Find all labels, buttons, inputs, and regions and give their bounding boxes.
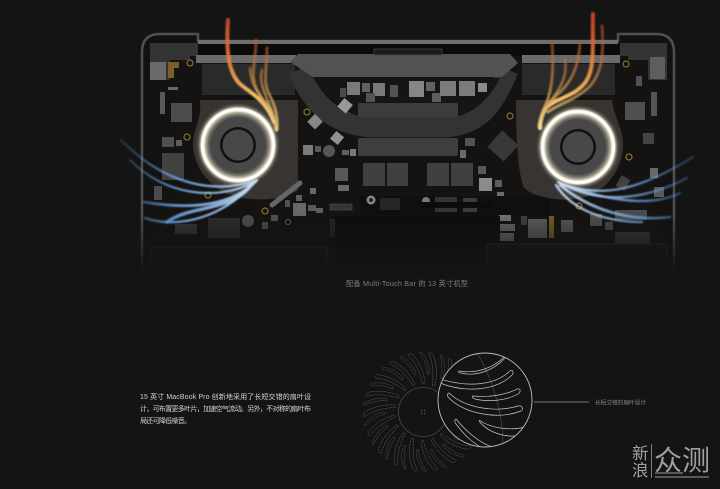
lower connector row xyxy=(360,196,550,215)
left fan xyxy=(202,109,274,181)
memory chips xyxy=(363,163,473,186)
board components xyxy=(154,76,664,244)
left air streams xyxy=(121,140,257,222)
left corner bracket xyxy=(150,43,198,80)
fan blade diagram xyxy=(363,352,589,472)
left flames xyxy=(227,20,277,130)
fade to background xyxy=(130,212,690,282)
bracket connector xyxy=(374,49,442,55)
right fan xyxy=(542,111,614,183)
upper pipe plate xyxy=(358,103,458,117)
left fan housing xyxy=(193,100,298,199)
screw strip left xyxy=(196,55,296,63)
heatsink left xyxy=(202,64,295,95)
right air streams xyxy=(556,157,693,222)
magnifier circle xyxy=(438,353,532,450)
top hinge bar xyxy=(198,40,618,44)
right corner bracket xyxy=(620,43,667,80)
gold connector xyxy=(168,62,179,78)
laptop chassis frame xyxy=(142,34,674,280)
centre bracket xyxy=(290,54,518,77)
lower pipe plate xyxy=(358,138,458,156)
caption: 13-inch model: 配备 Multi-Touch Bar 的 13 英寸机型 xyxy=(346,279,468,288)
watermark logo xyxy=(632,444,710,480)
callout leader line xyxy=(534,401,589,403)
watermark logo: 浪 xyxy=(632,461,648,480)
battery area xyxy=(335,216,500,272)
right fan housing xyxy=(516,100,623,200)
laptop internals illustration xyxy=(121,14,693,282)
heat pipe xyxy=(298,70,508,127)
callout label: 长短交错的扇叶设计 xyxy=(595,398,646,406)
body text xyxy=(140,392,311,425)
body text: 局还可降低噪音。 xyxy=(140,416,191,425)
right white block xyxy=(650,57,665,79)
board chip pocket xyxy=(318,78,500,116)
left glow ring xyxy=(203,110,273,180)
black band under hinge xyxy=(150,44,666,56)
right glow ring xyxy=(543,112,613,182)
right flames xyxy=(539,14,603,128)
watermark logo: 众测 xyxy=(654,445,710,476)
body text: 计，可布置更多叶片，加速空气流动。另外，不对称的扇叶布 xyxy=(140,404,311,413)
body text: 15 英寸 MacBook Pro 创新地采用了长短交错的扇叶设 xyxy=(140,392,311,401)
lower left compartment xyxy=(151,247,327,281)
blade ring xyxy=(363,352,483,472)
logic board xyxy=(154,60,662,238)
gold screws xyxy=(184,60,632,214)
screw strip right xyxy=(522,55,620,63)
watermark logo: 新 xyxy=(632,444,648,463)
board bracket xyxy=(272,183,300,205)
left white block xyxy=(150,62,166,80)
lower right compartment xyxy=(487,244,667,281)
heatsink right xyxy=(522,64,615,95)
